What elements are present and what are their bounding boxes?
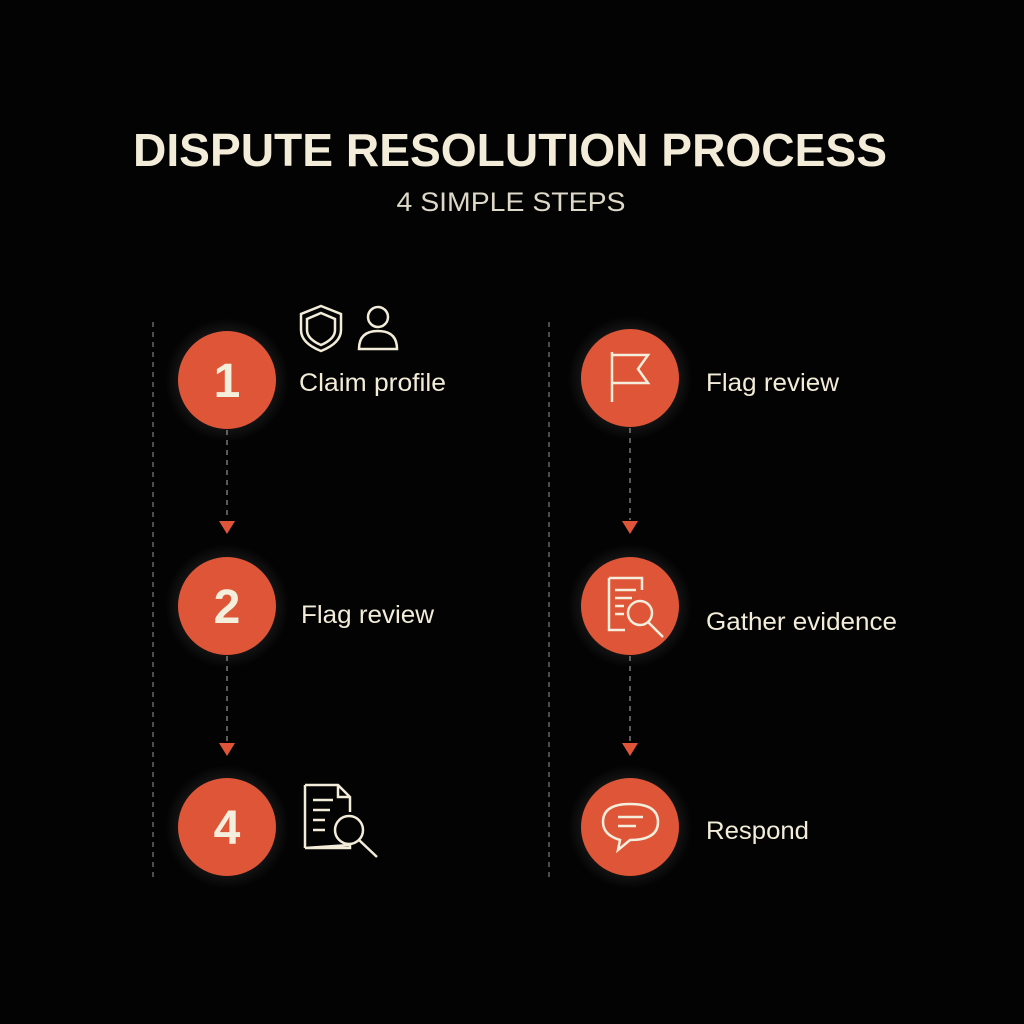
step: respond [568,765,692,889]
icon: document search [305,785,377,857]
right dashed guide [548,322,550,880]
icon: shield and user [301,306,397,351]
subtitle: 4 SIMPLE STEPS [396,187,626,217]
label 2: Flag review [301,601,435,629]
step 4 [165,765,289,889]
step: flag review right [568,316,692,440]
step: gather evidence [568,544,692,668]
step 4: 4 [214,802,241,855]
label right 1: Flag review [706,369,840,397]
step 1: 1 [214,355,240,408]
label right 3: Respond [706,817,809,845]
left dashed guide [152,322,154,880]
label 1: Claim profile [299,369,446,397]
label right 2: Gather evidence [706,608,897,636]
connector arrows [227,428,630,742]
step 2 [165,544,289,668]
step 1 [165,318,289,442]
step 2: 2 [214,581,240,634]
title: DISPUTE RESOLUTION PROCESS [133,124,887,176]
